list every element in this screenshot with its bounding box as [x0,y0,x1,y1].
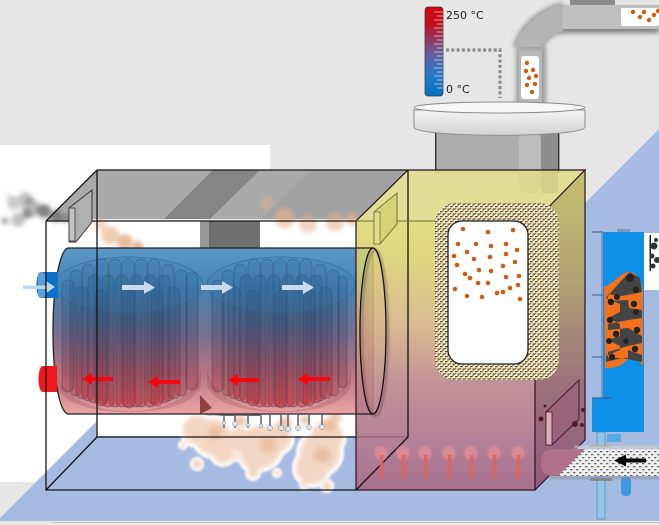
cold flow arrows [122,281,314,294]
feed pipe [541,446,659,479]
chimney [435,133,559,193]
top duct sample window [621,8,659,26]
open chamber back wall [97,221,356,436]
reactor screw [604,272,643,368]
yellow burner box [356,170,585,490]
tube bundle 1 [62,259,198,408]
left louvre [69,190,92,242]
chamber wire frame [46,170,408,490]
furnace window [448,221,528,364]
burner flames [374,446,524,479]
outlet stub red [38,366,57,392]
falling particles [452,227,522,301]
dotted sensor line [446,50,500,98]
side hatch with sparks [538,380,585,445]
reactor window [644,233,659,290]
cylinder heat exchanger [53,248,373,414]
white back panel [0,145,270,482]
orange smoke above cylinder [94,197,358,251]
blue reactor [592,229,644,432]
insulation layer [435,203,559,380]
thermometer label: 0: 0 °C [446,83,470,96]
feed arrow [614,454,646,466]
cylinder end ellipse [356,248,388,416]
grey smoke [2,192,71,227]
hot flow arrows [82,373,330,388]
duct sample window [521,56,539,99]
inlet stub blue [36,272,58,298]
tube bundle 2 [212,259,347,408]
chimney collar disk [414,102,585,135]
drip nozzles [222,414,324,432]
support rod [590,432,631,519]
outlet duct [513,0,659,109]
orange dust below cylinder [178,412,347,493]
blue floor [0,129,659,521]
right louvre on box [374,193,397,244]
thermometer label: 250: 250 °C [446,9,484,22]
thermometer [425,7,443,96]
inlet arrow [23,281,55,293]
dark column behind cylinder [200,221,260,416]
chamber roof [46,170,408,221]
